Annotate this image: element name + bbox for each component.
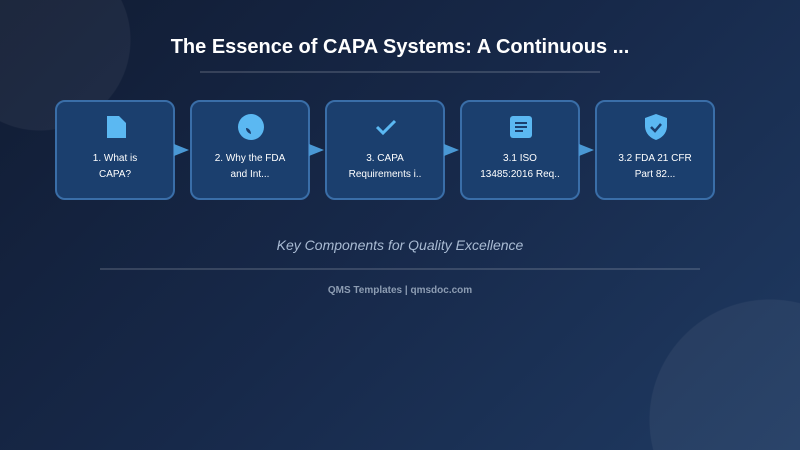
- arrow 1: [174, 144, 189, 156]
- label 2: and Int...: [231, 169, 269, 180]
- label 1: 1. What is: [93, 153, 137, 164]
- label 5: 3.2 FDA 21 CFR: [618, 153, 692, 164]
- label 3: [349, 153, 421, 180]
- icon: list doc: [510, 116, 532, 138]
- label 5: [618, 153, 692, 180]
- box 3: [325, 100, 445, 200]
- label 4: 13485:2016 Req..: [480, 169, 560, 180]
- arrow 2: [309, 144, 324, 156]
- label 4: [480, 153, 560, 180]
- box 5: [595, 100, 715, 200]
- icon: globe: [238, 114, 264, 140]
- arrow 3: [444, 144, 459, 156]
- label 3: 3. CAPA: [366, 153, 404, 164]
- footer: QMS Templates | qmsdoc.com: [328, 285, 472, 296]
- arrow 4: [579, 144, 594, 156]
- box 2: [190, 100, 310, 200]
- icon: document: [107, 116, 126, 138]
- subtitle: Key Components for Quality Excellence: [277, 237, 523, 253]
- label 1: [93, 153, 137, 180]
- label 5: Part 82...: [635, 169, 675, 180]
- label 3: Requirements i..: [349, 169, 421, 180]
- label 1: CAPA?: [99, 169, 131, 180]
- icon: shield: [645, 114, 667, 140]
- title: The Essence of CAPA Systems: A Continuous ...: [171, 36, 629, 58]
- label 2: [215, 153, 286, 180]
- label 2: 2. Why the FDA: [215, 153, 285, 164]
- icon: check: [376, 120, 396, 135]
- box 4: [460, 100, 580, 200]
- label 4: 3.1 ISO: [503, 153, 537, 164]
- box 1: [55, 100, 175, 200]
